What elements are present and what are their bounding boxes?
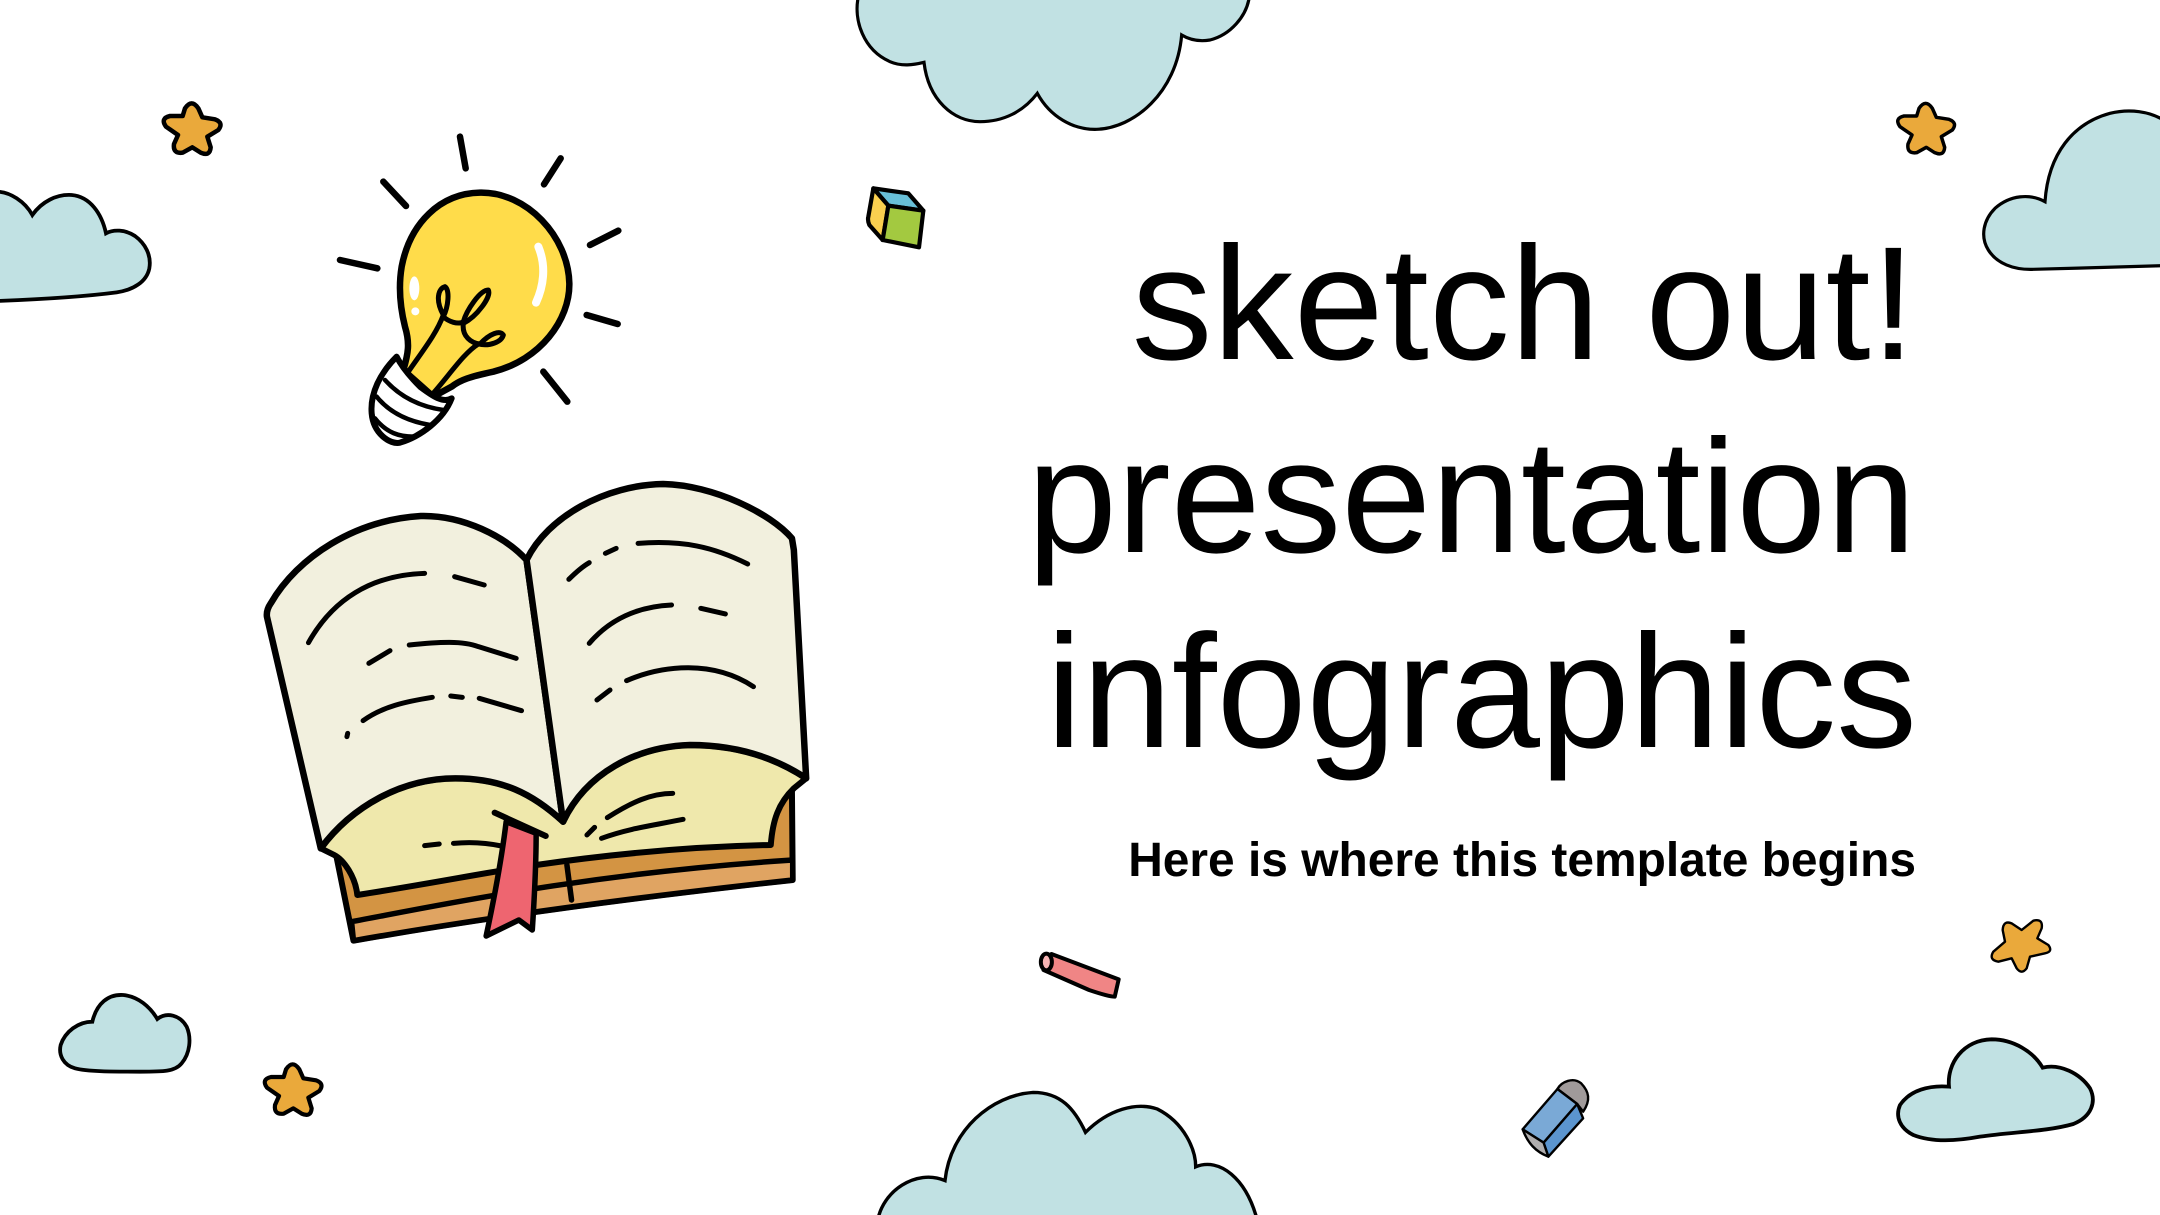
book base: lower strip	[352, 860, 793, 941]
cloud: left	[0, 192, 150, 301]
subtitle: Here is where this template begins	[1128, 834, 1916, 887]
icon: light bulb	[340, 137, 618, 443]
title: sketch out!	[1132, 214, 1916, 394]
page text strokes	[308, 543, 753, 846]
icon: open book	[267, 484, 806, 941]
title	[1027, 214, 1917, 782]
cloud: top right	[1984, 111, 2160, 269]
book base: page block	[336, 790, 793, 941]
star: bottom left	[265, 1064, 322, 1115]
cloud: top centre	[857, 0, 1249, 129]
red bookmark	[486, 822, 536, 936]
yellow inner pages	[321, 745, 806, 895]
icon: cube	[868, 188, 923, 247]
book base: spine line	[567, 865, 572, 900]
icon: chalk	[1041, 954, 1119, 997]
star: right	[1992, 920, 2050, 972]
cloud: bottom right	[1898, 1039, 2093, 1140]
star: top right	[1898, 103, 1955, 154]
icon: eraser	[1523, 1080, 1588, 1157]
left page	[267, 516, 563, 848]
cloud: bottom left	[60, 995, 189, 1072]
star: top left	[164, 103, 221, 154]
bookmark top fold	[495, 813, 546, 836]
right page	[527, 484, 806, 822]
cloud: bottom centre	[877, 1092, 1258, 1215]
title: infographics	[1046, 602, 1917, 782]
title: presentation	[1027, 407, 1916, 587]
